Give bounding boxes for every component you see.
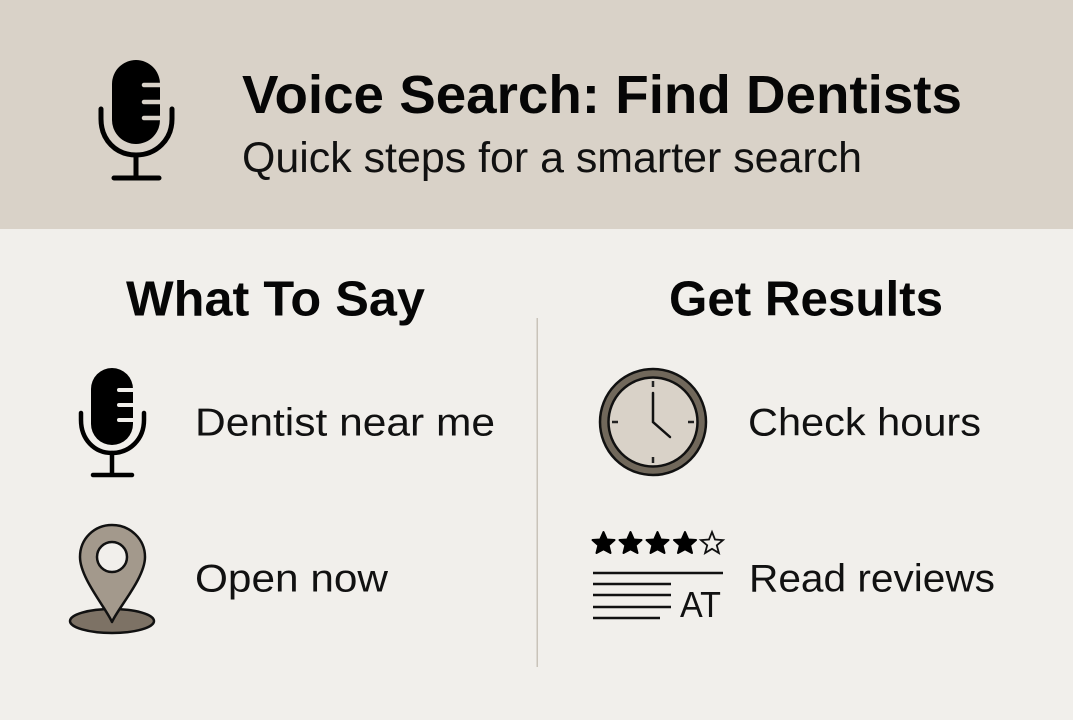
text: read reviews: Read reviews xyxy=(749,558,995,600)
icon: microphone xyxy=(81,368,144,475)
icon: location pin xyxy=(70,525,154,633)
panel: header xyxy=(0,0,1073,229)
text: dentist near me: Dentist near me xyxy=(195,402,495,444)
panel: what to say xyxy=(70,272,495,633)
icon: clock xyxy=(600,369,706,475)
title: Voice Search: Find Dentists xyxy=(242,65,962,125)
subtitle: Quick steps for a smarter search xyxy=(242,134,862,182)
heading: what to say: What To Say xyxy=(126,272,425,326)
icon: header microphone xyxy=(101,60,172,178)
text: open now: Open now xyxy=(195,558,388,600)
icon: star rating and review lines xyxy=(592,532,723,625)
text: check hours: Check hours xyxy=(748,402,981,444)
heading: get results: Get Results xyxy=(669,272,943,326)
panel: get results xyxy=(592,272,995,625)
icon: star rating and review lines: AT xyxy=(680,584,721,625)
